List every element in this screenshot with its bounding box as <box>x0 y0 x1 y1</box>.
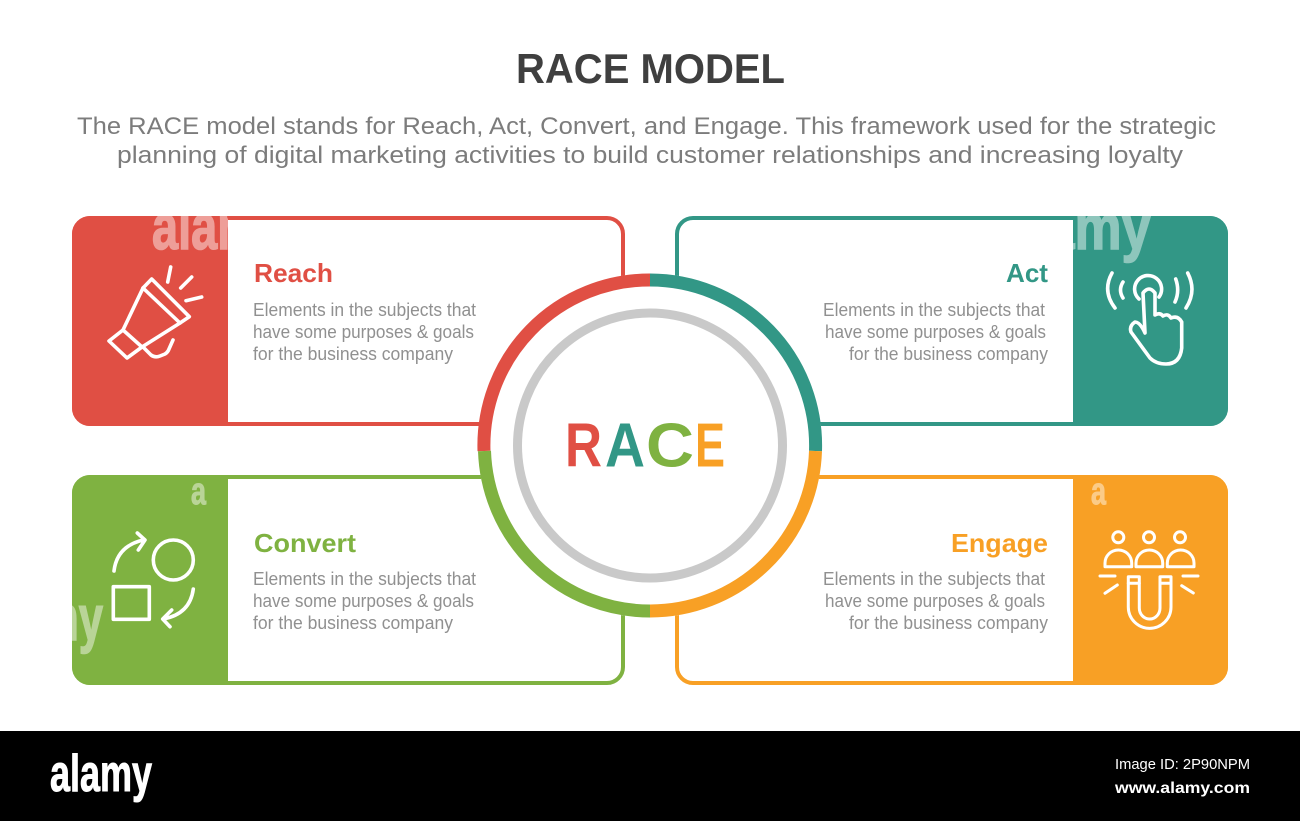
convert description: Elements in the subjects that <box>253 569 476 589</box>
act description <box>823 300 1048 364</box>
subtitle text: planning of digital marketing activities to build customer relationships and increasing loyalty <box>117 142 1183 169</box>
engage card outline <box>677 477 1226 683</box>
convert description: have some purposes & goals <box>253 591 474 611</box>
centre label RACE <box>565 412 725 480</box>
centre label RACE: E <box>695 412 725 480</box>
watermark fragment: a <box>1091 471 1107 513</box>
title: RACE MODEL <box>516 45 785 92</box>
engage description: Elements in the subjects that <box>823 569 1045 589</box>
act heading: Act <box>1006 258 1048 288</box>
act description: for the business company <box>849 344 1048 364</box>
reach heading: Reach <box>254 258 333 288</box>
centre label RACE: R <box>565 412 602 480</box>
engage description: have some purposes & goals <box>825 591 1045 611</box>
centre label RACE: A <box>605 412 645 480</box>
engage description: for the business company <box>849 613 1048 633</box>
convert card outline <box>74 477 623 683</box>
ring arc: teal <box>650 280 816 451</box>
website: www.alamy.com <box>1114 780 1250 797</box>
panel: convert <box>40 471 623 685</box>
convert heading: Convert <box>254 528 356 558</box>
inner grey ring <box>518 313 782 578</box>
reach colour block <box>72 216 228 426</box>
engage description <box>823 569 1048 633</box>
icon: people and magnet <box>1100 532 1198 628</box>
reach description <box>253 300 476 364</box>
watermark fragment: my <box>40 582 103 654</box>
reach description: for the business company <box>253 344 453 364</box>
act colour block <box>1073 216 1228 426</box>
ring arc: red <box>484 280 650 451</box>
icon: shapes cycle <box>113 533 193 627</box>
icon: megaphone <box>109 267 202 358</box>
convert description: for the business company <box>253 613 453 633</box>
watermark fragment: amy <box>1045 191 1151 263</box>
act description: have some purposes & goals <box>825 322 1046 342</box>
act card outline <box>677 218 1226 424</box>
panel: engage <box>677 471 1228 685</box>
act description: Elements in the subjects that <box>823 300 1045 320</box>
panel: reach <box>72 216 625 426</box>
reach description: have some purposes & goals <box>253 322 474 342</box>
footer bar <box>0 731 1300 821</box>
centre label RACE: C <box>646 412 694 480</box>
central ring <box>478 274 822 618</box>
engage colour block <box>1073 475 1228 685</box>
subtitle text: The RACE model stands for Reach, Act, Convert, and Engage. This framework used for the strategic <box>77 113 1216 140</box>
reach description: Elements in the subjects that <box>253 300 476 320</box>
reach card outline <box>74 218 623 424</box>
convert description <box>253 569 476 633</box>
footer logo: alamy <box>50 745 152 803</box>
watermark fragment: alamy <box>152 191 285 263</box>
subtitle text <box>77 113 1216 169</box>
ring arc: green <box>484 451 650 611</box>
convert colour block <box>72 475 228 685</box>
watermark fragment: a <box>191 471 207 513</box>
image id: Image ID: 2P90NPM <box>1115 756 1250 773</box>
ring arc: orange <box>650 451 816 611</box>
engage heading: Engage <box>951 528 1048 558</box>
icon: tapping hand <box>1108 273 1192 364</box>
panel: act <box>675 216 1228 426</box>
